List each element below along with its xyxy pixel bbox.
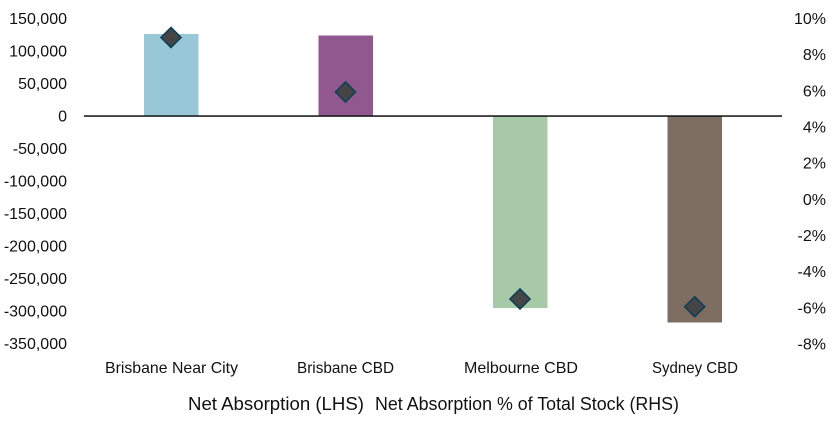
left axis labels [4,11,67,353]
marker: Melbourne CBD [510,289,530,309]
legend: Net Absorption (LHS) [188,394,364,414]
right axis labels: -6% [798,300,826,318]
category labels: Brisbane Near City [105,360,238,377]
left axis labels: -300,000 [4,304,67,320]
left axis labels: -250,000 [4,271,67,288]
category labels [105,360,738,377]
bar: Brisbane CBD [318,36,373,116]
right axis labels [794,11,826,354]
marker: Brisbane CBD [336,82,356,102]
left axis labels: -100,000 [4,174,67,190]
legend [188,394,679,414]
right axis labels: 0% [803,192,826,209]
bar: Brisbane Near City [144,34,198,116]
right axis labels: 8% [803,47,826,64]
left axis labels: -150,000 [4,206,67,223]
right axis labels: -4% [798,264,826,281]
bar: Sydney CBD [668,116,722,322]
right axis labels: 6% [803,84,826,100]
left axis labels: 50,000 [18,76,67,93]
category labels: Melbourne CBD [464,360,578,377]
left axis labels: -350,000 [4,336,67,353]
legend: Net Absorption % of Total Stock (RHS) [375,394,679,414]
marker: Sydney CBD [685,297,705,317]
category labels: Brisbane CBD [297,360,394,377]
right axis labels: -8% [798,336,826,354]
left axis labels: 150,000 [9,11,67,28]
category labels: Sydney CBD [652,360,738,377]
marker: Brisbane Near City [161,28,181,48]
left axis labels: -200,000 [4,238,67,256]
zero axis line [84,115,782,117]
right axis labels: 10% [794,11,826,28]
left axis labels: 0 [58,108,67,126]
bar: Melbourne CBD [493,116,548,308]
left axis labels: -50,000 [13,141,67,158]
left axis labels: 100,000 [9,44,67,60]
right axis labels: 4% [803,120,826,136]
right axis labels: 2% [803,156,826,172]
right axis labels: -2% [798,228,826,245]
